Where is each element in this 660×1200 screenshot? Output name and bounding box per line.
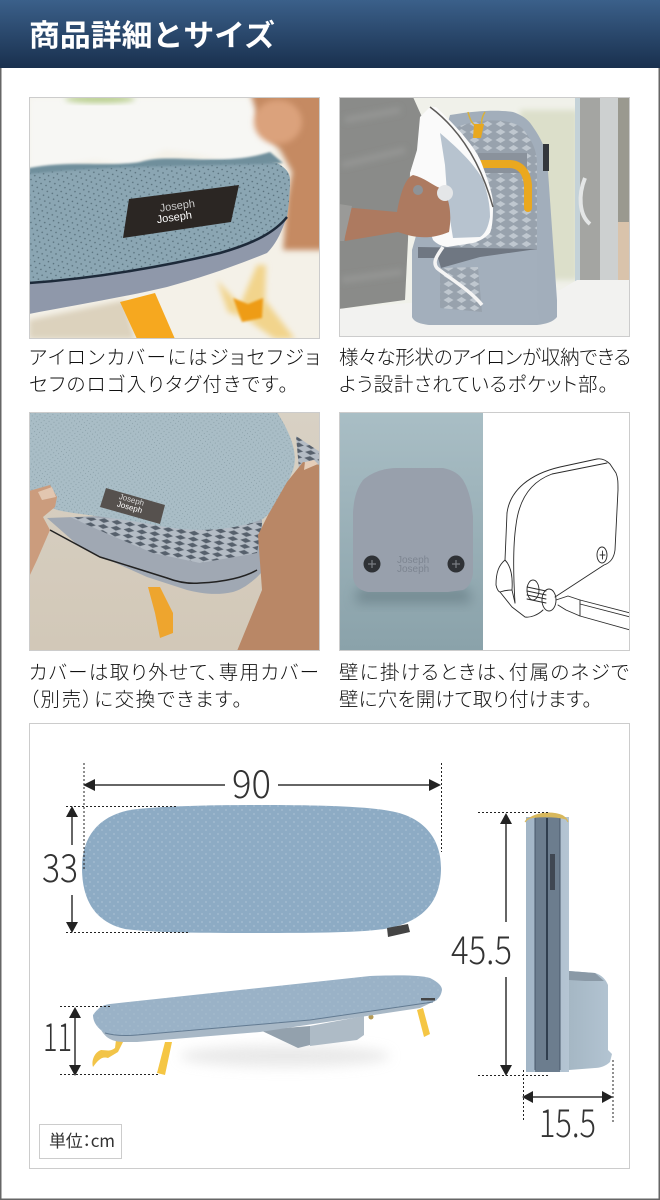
logo tag: Joseph xyxy=(159,198,196,215)
pocket xyxy=(412,317,430,325)
caption 3: カバーは取り外せて、専用カバー xyxy=(29,656,319,685)
photo: iron stored in pocket xyxy=(339,97,630,337)
logo tag xyxy=(123,185,239,238)
board in use, side perspective xyxy=(92,975,442,1075)
photo border xyxy=(30,412,320,650)
caption 3 xyxy=(29,656,319,712)
line drawing of mount xyxy=(496,459,630,630)
board back xyxy=(412,111,557,325)
dimension: width 90 xyxy=(83,754,442,870)
hands xyxy=(29,485,57,577)
photo border xyxy=(340,412,630,650)
dimension: height 45.5 xyxy=(451,812,548,1076)
panel: dimensions xyxy=(30,724,630,1168)
photo: wall mount xyxy=(339,412,630,651)
board frame and mesh xyxy=(47,510,262,594)
dimension: depth 33 xyxy=(42,806,190,933)
dimension: depth 15.5: 15.5 xyxy=(539,1093,596,1148)
iron xyxy=(410,107,493,247)
unit label xyxy=(40,1124,122,1158)
photo: removable cover: Joseph xyxy=(116,499,143,515)
unit label: 単位：cm xyxy=(49,1127,115,1152)
photo: removable cover: Joseph xyxy=(118,492,145,508)
dimension: height 45.5: 45.5 xyxy=(451,920,512,975)
dimension: width 90: 90 xyxy=(232,754,271,809)
photo border xyxy=(30,98,320,338)
caption 4: 壁に穴を開けて取り付けます。 xyxy=(339,683,592,712)
caption 1: アイロンカバーにはジョセフジョ xyxy=(29,341,320,370)
cloth cover xyxy=(29,412,295,530)
top view of board xyxy=(82,805,441,937)
header band xyxy=(0,0,660,68)
caption 4 xyxy=(339,656,629,712)
caption 1 xyxy=(29,341,320,397)
caption 1: セフのロゴ入りタグ付きです。 xyxy=(29,368,288,397)
dimension: height 11 xyxy=(43,1006,160,1076)
photo: logo tag on cover xyxy=(29,92,325,339)
caption 2: よう設計されているポケット部。 xyxy=(339,368,608,397)
wall plate xyxy=(353,468,473,592)
photo border xyxy=(340,98,630,336)
caption 4: 壁に掛けるときは、付属のネジで xyxy=(339,656,629,685)
dimension: height 11: 11 xyxy=(43,1007,72,1062)
dimension: depth 15.5 xyxy=(522,1060,613,1148)
wall plate: Joseph xyxy=(397,564,429,575)
title: 商品詳細とサイズ xyxy=(29,19,275,53)
caption 2 xyxy=(339,341,631,397)
dimension: depth 33: 33 xyxy=(42,838,78,893)
wall plate: Joseph xyxy=(397,555,429,566)
caption 2: 様々な形状のアイロンが収納できる xyxy=(339,341,631,370)
hand xyxy=(343,175,450,241)
caption 3: （別売）に交換できます。 xyxy=(29,683,242,712)
photo: removable cover xyxy=(29,412,320,651)
stored board, upright view xyxy=(525,813,612,1072)
logo tag: Joseph xyxy=(156,209,193,226)
